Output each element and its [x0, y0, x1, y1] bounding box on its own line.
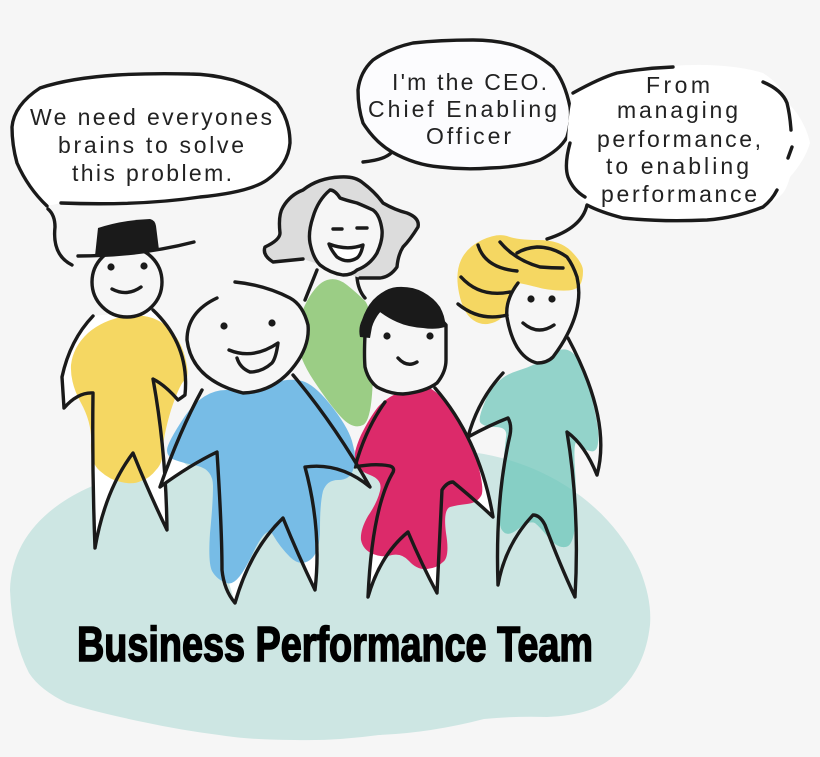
speech bubble: left — [12, 74, 290, 265]
bubble text: brains to solve — [58, 132, 244, 158]
bubble text — [368, 69, 557, 149]
speech bubble: right — [547, 65, 810, 239]
bubble text: I'm the CEO. — [392, 69, 547, 95]
ground blob — [10, 450, 650, 740]
person: blue shirt — [160, 282, 370, 603]
hair — [264, 177, 418, 278]
face — [507, 283, 578, 363]
person: green shirt with grey hair — [264, 177, 418, 426]
bubble text: From — [646, 72, 710, 98]
speech bubble: centre — [358, 40, 571, 169]
person: red shirt — [355, 287, 493, 597]
person: teal shirt with blond hair — [457, 235, 601, 597]
bubble text: performance, — [597, 126, 761, 152]
darker overlap — [500, 460, 574, 548]
bubble text: Officer — [426, 123, 511, 149]
bubble text: to enabling — [606, 153, 749, 179]
face — [92, 247, 162, 317]
bubble text: We need everyones — [30, 104, 272, 130]
hat — [95, 219, 159, 256]
bubble text — [597, 72, 761, 207]
bubble text: this problem. — [72, 160, 232, 186]
bubble text: managing — [617, 97, 738, 123]
person: yellow shirt — [62, 219, 194, 548]
bubble text: performance — [601, 181, 757, 207]
face — [364, 300, 446, 394]
bubble text — [30, 104, 272, 186]
black hair — [359, 287, 445, 338]
title: Business Performance Team — [77, 618, 593, 672]
bubble text: Chief Enabling — [368, 96, 557, 122]
face — [309, 190, 382, 275]
face — [187, 282, 308, 393]
